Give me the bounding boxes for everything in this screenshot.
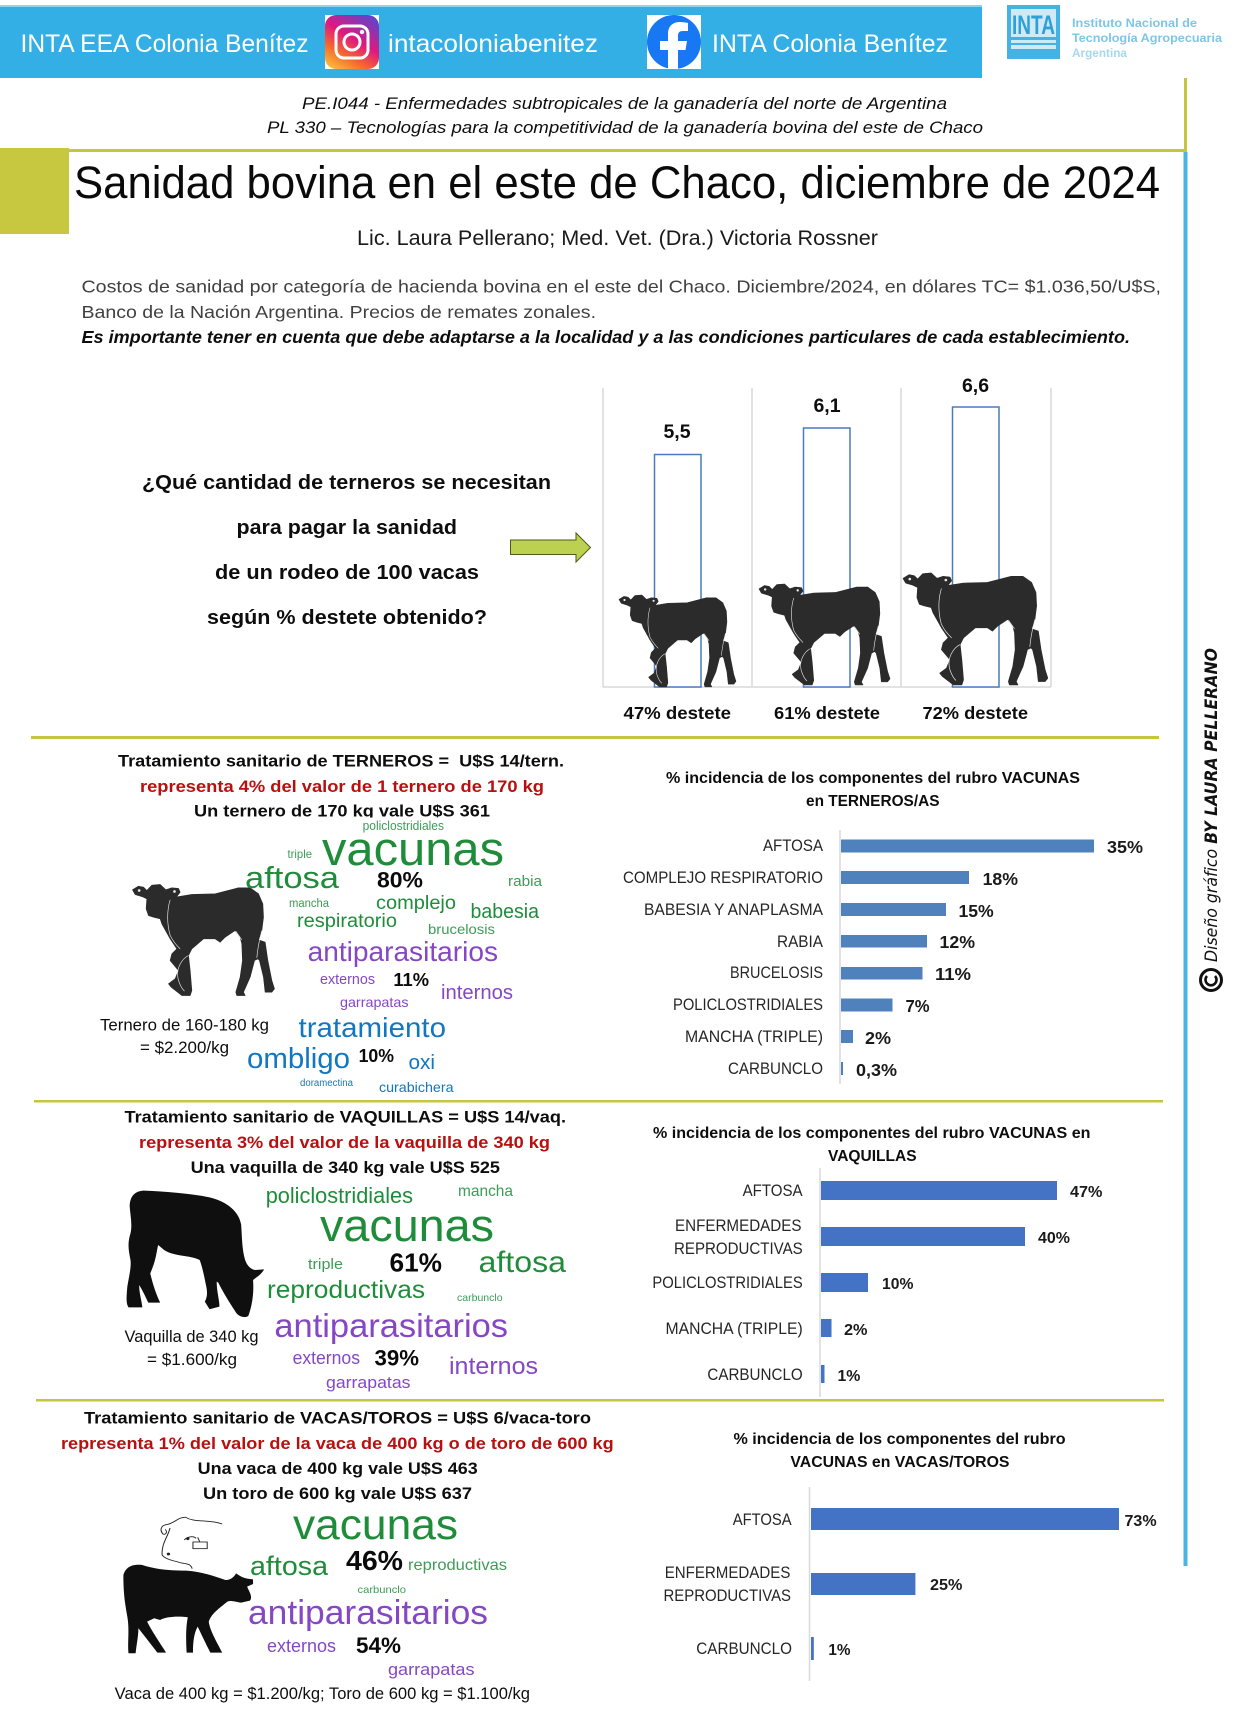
word cloud: 39% [374,1346,419,1370]
category labels: AFTOSA [743,1182,803,1200]
logo text: Tecnología Agropecuaria [1072,31,1222,45]
word cloud: externos [267,1636,336,1656]
panel: vaquillas [124,1108,566,1392]
panel: terneros [100,752,564,1095]
word cloud: complejo [376,893,456,914]
heading: representa 1% del valor de la vaca de 400 kg o de toro de 600 kg [61,1434,614,1453]
category labels [624,703,1028,723]
value labels: 6,6 [962,375,989,397]
word cloud: aftosa [478,1246,566,1279]
heading: Tratamiento sanitario de VAQUILLAS = U$S 14/vaq. [124,1108,566,1126]
value labels: 0,3% [856,1060,897,1080]
bars [811,1508,1119,1660]
bar 72% [952,407,999,687]
word cloud: mancha [289,898,330,910]
word cloud: oxi [408,1052,435,1074]
category labels: 47% destete [624,703,731,723]
word cloud: doramectina [300,1078,353,1089]
word cloud: tratamiento [298,1012,446,1043]
section divider [31,736,1159,739]
category labels: RABIA [777,933,823,951]
bar 47% [654,454,701,687]
section divider [34,1100,1163,1102]
category labels: 61% destete [774,703,880,723]
title: Sanidad bovina en el este de Chaco, diciembre de 2024 [74,157,1160,208]
logo text: Argentina [1072,46,1127,60]
project lines [267,94,983,137]
word cloud: externos [293,1348,360,1368]
heading [61,1408,614,1503]
category labels: 72% destete [922,703,1028,723]
price note: Ternero de 160-180 kg [100,1016,269,1034]
category labels: BABESIA Y ANAPLASMA [644,901,823,919]
category labels: POLICLOSTRIDIALES [673,996,823,1014]
category labels: CARBUNCLO [728,1060,823,1078]
chart title [666,770,1080,810]
chart title: % incidencia de los componentes del rubro [734,1431,1066,1448]
word cloud: policlostridiales [363,818,444,833]
word cloud: aftosa [250,1551,329,1581]
heading: representa 3% del valor de la vaquilla de 340 kg [139,1133,550,1152]
category labels: POLICLOSTRIDIALES [652,1274,803,1292]
word cloud: carbunclo [457,1292,503,1304]
credit: diseño gráfico: Diseño gráfico BY LAURA PELLERANO [1202,648,1222,962]
word cloud: triple [308,1256,343,1273]
heading: Una vaquilla de 340 kg vale U$S 525 [191,1158,500,1177]
value labels: 11% [935,964,971,984]
category labels: COMPLEJO RESPIRATORIO [623,869,823,887]
icon: facebook [647,15,701,69]
value labels: 1% [828,1642,850,1659]
question text [142,472,551,629]
header band [0,5,982,78]
logo text: Instituto Nacional de [1072,16,1197,30]
value labels: 12% [940,932,975,952]
value labels: 6,1 [813,395,841,417]
calf silhouette 2 [759,584,890,685]
value labels: 18% [983,869,1018,889]
value labels: 35% [1107,837,1143,857]
word cloud: garrapatas [340,994,408,1010]
word cloud: 80% [377,868,423,892]
project lines: PL 330 – Tecnologías para la competitividad de la ganadería bovina del este de Chaco [267,118,983,137]
value labels: 2% [865,1028,891,1048]
heading: Tratamiento sanitario de VACAS/TOROS = U$S 6/vaca-toro [84,1408,591,1428]
question text: ¿Qué cantidad de terneros se necesitan [142,472,551,494]
chart title: en TERNEROS/AS [806,793,940,810]
word cloud: 54% [356,1633,401,1658]
icon: instagram [325,15,379,69]
word cloud: internos [449,1353,538,1380]
bars [841,840,1094,1075]
chart title: VAQUILLAS [828,1148,917,1165]
category labels: MANCHA (TRIPLE) [685,1028,823,1046]
logo text [1072,16,1222,60]
word cloud: respiratorio [297,911,397,932]
value labels: 5,5 [663,421,691,443]
category labels: CARBUNCLO [707,1366,803,1384]
category labels [623,837,823,1078]
price note: = $1.600/kg [147,1351,237,1369]
value labels: 73% [1124,1513,1157,1530]
logo: INTA [1007,5,1222,60]
price note: Vaquilla de 340 kg [124,1328,258,1346]
question text: según % destete obtenido? [207,607,487,629]
category labels: CARBUNCLO [696,1640,792,1658]
word cloud [245,818,543,1095]
question text: de un rodeo de 100 vacas [215,562,479,584]
header text: INTA EEA Colonia Benítez: INTA EEA Colonia Benítez [20,30,308,58]
word cloud: aftosa [245,860,340,895]
category labels: REPRODUCTIVAS [674,1240,803,1258]
price note: Vaca de 400 kg = $1.200/kg; Toro de 600 kg = $1.100/kg [115,1685,530,1703]
heading [124,1108,566,1177]
value labels [828,1513,1157,1659]
chart title: % incidencia de los componentes del rubro VACUNAS en [653,1125,1090,1142]
word cloud [248,1501,507,1679]
category labels: ENFERMEDADES [675,1217,802,1235]
calf silhouette 3 [903,573,1048,685]
value labels: 2% [844,1322,868,1339]
icon: grazing heifer [127,1191,264,1317]
intro text: Banco de la Nación Argentina. Precios de remates zonales. [82,302,596,322]
word cloud: 61% [390,1248,442,1278]
word cloud: reproductivas [267,1276,425,1304]
category labels: ENFERMEDADES [665,1564,790,1582]
bar 61% [804,428,850,687]
word cloud [266,1183,566,1392]
word cloud: externos [320,971,375,988]
icon: copyright [1200,970,1222,990]
category labels: BRUCELOSIS [730,964,823,982]
word cloud: curabichera [379,1079,454,1095]
category labels: AFTOSA [733,1511,792,1529]
category labels [652,1182,803,1384]
value labels: 47% [1070,1184,1102,1201]
value labels: 25% [930,1577,962,1594]
panel: vacas y toros [61,1408,614,1703]
word cloud: antiparasitarios [248,1594,488,1632]
word cloud: antiparasitarios [308,936,498,967]
word cloud: mancha [458,1183,513,1200]
question text: para pagar la sanidad [236,517,457,539]
section divider [36,1399,1164,1402]
chart: vacunas en vaquillas [652,1125,1102,1397]
chart title [734,1431,1066,1471]
word cloud: ombligo [247,1043,350,1075]
category labels: REPRODUCTIVAS [664,1587,791,1605]
word cloud: antiparasitarios [274,1307,508,1344]
heading: Una vaca de 400 kg vale U$S 463 [198,1459,478,1478]
heading: Un ternero de 170 kg vale U$S 361 [194,802,490,820]
word cloud: brucelosis [428,921,495,937]
word cloud: babesia [470,901,540,923]
project lines: PE.I044 - Enfermedades subtropicales de la ganadería del norte de Argentina [302,94,947,113]
heading: Tratamiento sanitario de TERNEROS = U$S 14/tern. [118,752,564,770]
word cloud: policlostridiales [266,1183,413,1208]
word cloud: carbunclo [358,1584,406,1596]
bar chart: terneros per herd [603,375,1051,723]
heading [118,752,564,824]
value labels [838,1184,1102,1385]
value labels [856,837,1143,1080]
intro text: Costos de sanidad por categoría de hacienda bovina en el este del Chaco. Diciembre/2024, en dólares TC= $1.036,50/U$S, [82,276,1161,296]
chart: vacunas en vacas y toros [664,1431,1157,1681]
word cloud: reproductivas [408,1557,507,1574]
chart: vacunas en terneros [623,770,1143,1084]
icon: calf [132,884,274,995]
word cloud: garrapatas [388,1660,474,1679]
category labels: MANCHA (TRIPLE) [666,1320,803,1338]
word cloud: 11% [393,970,429,990]
price note [100,1016,269,1057]
heading: Un toro de 600 kg vale U$S 637 [203,1484,472,1503]
calf silhouette 1 [619,595,736,687]
header text: intacoloniabenitez: intacoloniabenitez [388,30,598,58]
logo: INTA: INTA [1012,10,1055,40]
value labels: 15% [958,901,994,921]
word cloud: vacunas [293,1501,458,1549]
heading: representa 4% del valor de 1 ternero de 170 kg [140,777,544,796]
word cloud: 10% [359,1046,394,1066]
word cloud: 46% [346,1545,403,1576]
authors: Lic. Laura Pellerano; Med. Vet. (Dra.) Victoria Rossner [357,227,878,250]
intro text [82,276,1161,347]
chart title [653,1125,1090,1165]
price note [124,1328,258,1369]
chart title: VACUNAS en VACAS/TOROS [790,1454,1010,1471]
icon: bull outline [161,1517,222,1569]
category labels: AFTOSA [763,837,823,855]
value labels: 7% [906,996,930,1016]
value labels: 1% [838,1368,860,1385]
word cloud: triple [288,847,312,861]
chart title: % incidencia de los componentes del rubro VACUNAS [666,770,1080,787]
price note: = $2.200/kg [140,1039,229,1057]
word cloud: garrapatas [326,1373,410,1392]
icon: cow [123,1565,253,1653]
value labels: 10% [882,1276,913,1293]
intro text: Es importante tener en cuenta que debe adaptarse a la localidad y a las condiciones particulares de cada establecimiento. [82,327,1130,347]
word cloud: vacunas [322,822,504,875]
value labels [663,375,989,443]
category labels [664,1511,792,1658]
word cloud: rabia [508,873,543,890]
bars [821,1181,1057,1383]
header text: INTA Colonia Benítez: INTA Colonia Benítez [712,30,948,58]
word cloud: vacunas [320,1200,494,1251]
word cloud: internos [441,982,513,1004]
value labels: 40% [1038,1230,1070,1247]
arrow [510,533,590,562]
